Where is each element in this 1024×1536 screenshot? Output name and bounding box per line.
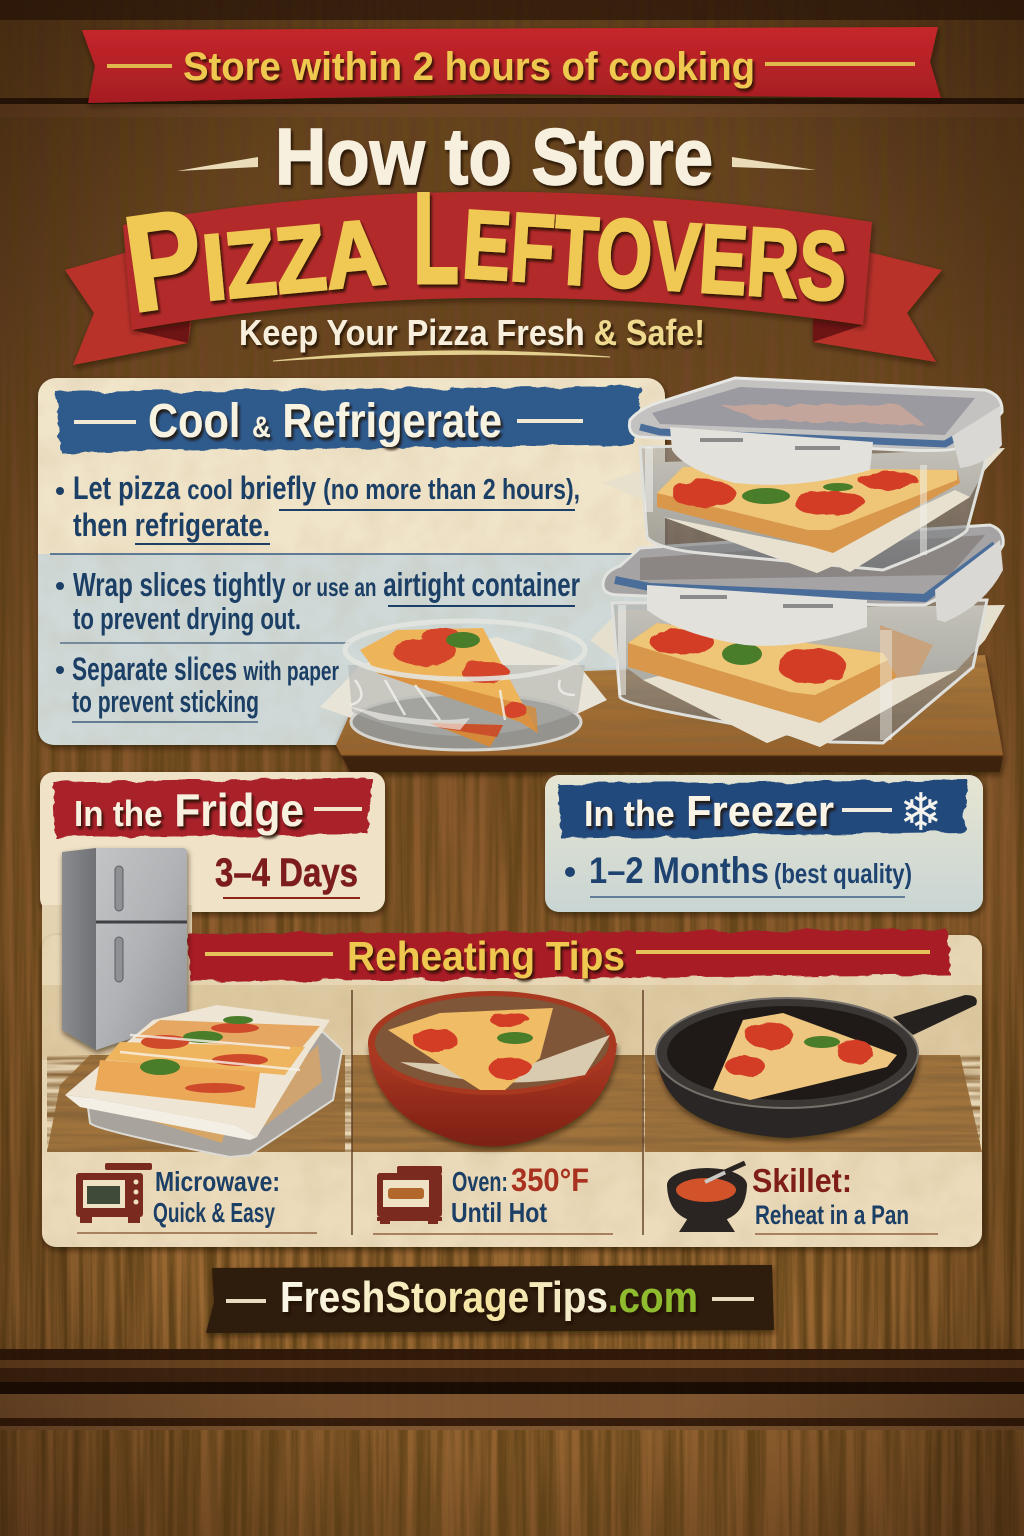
freezer duration: 1–2 Months bbox=[589, 850, 769, 891]
freezer duration bbox=[565, 850, 912, 898]
title banner: Pizza Leftovers bbox=[65, 165, 942, 365]
skillet tip: Skillet: bbox=[752, 1162, 852, 1199]
bullet 3: Separate slices with paper bbox=[72, 651, 339, 687]
subtitle: Keep Your Pizza Fresh & Safe! bbox=[239, 312, 705, 353]
bullet 2: Wrap slices tightly or use an airtight container bbox=[73, 566, 580, 603]
upper lid bbox=[629, 378, 1002, 451]
container stack: upper bbox=[603, 378, 1005, 573]
microwave tip: Microwave: bbox=[155, 1166, 280, 1197]
heading band bbox=[56, 386, 640, 452]
oven tip bbox=[373, 1162, 613, 1235]
upper front clip bbox=[670, 427, 873, 485]
lower paper behind bbox=[590, 605, 1005, 747]
fridge duration: 3–4 Days bbox=[215, 851, 358, 895]
food: red dish with slice bbox=[368, 991, 617, 1146]
title words: P bbox=[116, 180, 212, 341]
lower side clip bbox=[935, 540, 1003, 622]
skillet tip: Reheat in a Pan bbox=[755, 1200, 909, 1230]
lower lid bbox=[603, 525, 1003, 605]
website text: FreshStorageTips.com bbox=[280, 1273, 698, 1322]
title words: IZZA bbox=[198, 200, 389, 320]
title words: EFTOVERS bbox=[460, 189, 850, 321]
bullet 3 bbox=[56, 651, 339, 723]
bullet 3: to prevent sticking bbox=[72, 684, 259, 719]
panel: in the freezer bbox=[545, 775, 983, 912]
top ribbon bbox=[82, 27, 941, 103]
heading band: Cool & Refrigerate bbox=[148, 395, 502, 448]
container stack: lower bbox=[590, 525, 1005, 747]
website banner bbox=[206, 1265, 774, 1333]
fridge heading: In the Fridge bbox=[74, 784, 304, 836]
icon: cooking pot bbox=[667, 1163, 747, 1232]
bullet 1: Let pizza cool briefly (no more than 2 hours), bbox=[73, 470, 580, 506]
icon: oven bbox=[377, 1166, 442, 1224]
freezer duration: (best quality) bbox=[774, 858, 912, 889]
freezer heading bbox=[558, 780, 968, 843]
reheating heading: Reheating Tips bbox=[347, 933, 625, 979]
round container with wrapped slices bbox=[320, 621, 607, 750]
bullet 2 bbox=[56, 566, 580, 644]
icon: refrigerator bbox=[62, 848, 187, 1050]
fridge heading bbox=[53, 778, 372, 838]
freezer heading: In the Freezer bbox=[584, 787, 834, 836]
panel: reheating tips bbox=[42, 905, 982, 1247]
upper paper bbox=[603, 448, 1005, 573]
food: wrapped slices in dish bbox=[65, 1005, 342, 1157]
reheating heading bbox=[188, 930, 950, 981]
ribbon text: Store within 2 hours of cooking bbox=[183, 45, 755, 89]
food: skillet with slice bbox=[656, 995, 977, 1138]
wooden board bbox=[336, 655, 1003, 772]
oven tip: Until Hot bbox=[451, 1197, 547, 1228]
oven tip: 350°F bbox=[511, 1162, 589, 1198]
microwave tip: Quick & Easy bbox=[153, 1197, 275, 1228]
freezer heading: ❄ bbox=[899, 783, 943, 843]
skillet tip bbox=[667, 1162, 938, 1235]
bullet 1 bbox=[56, 470, 580, 544]
bullet 1: then refrigerate. bbox=[73, 507, 270, 543]
lower front clip bbox=[647, 585, 867, 646]
microwave tip bbox=[76, 1163, 317, 1234]
title words bbox=[116, 165, 850, 341]
oven tip: Oven: bbox=[452, 1166, 508, 1197]
upper side clip bbox=[952, 406, 1002, 468]
title words: L bbox=[413, 165, 459, 311]
icon: microwave bbox=[76, 1163, 152, 1223]
panel: cool and refrigerate bbox=[38, 378, 665, 745]
wood strip bbox=[47, 1055, 982, 1152]
title: How to Store: How to Store bbox=[275, 112, 713, 201]
bullet 2: to prevent drying out. bbox=[73, 601, 301, 636]
panel: in the fridge bbox=[40, 772, 385, 912]
